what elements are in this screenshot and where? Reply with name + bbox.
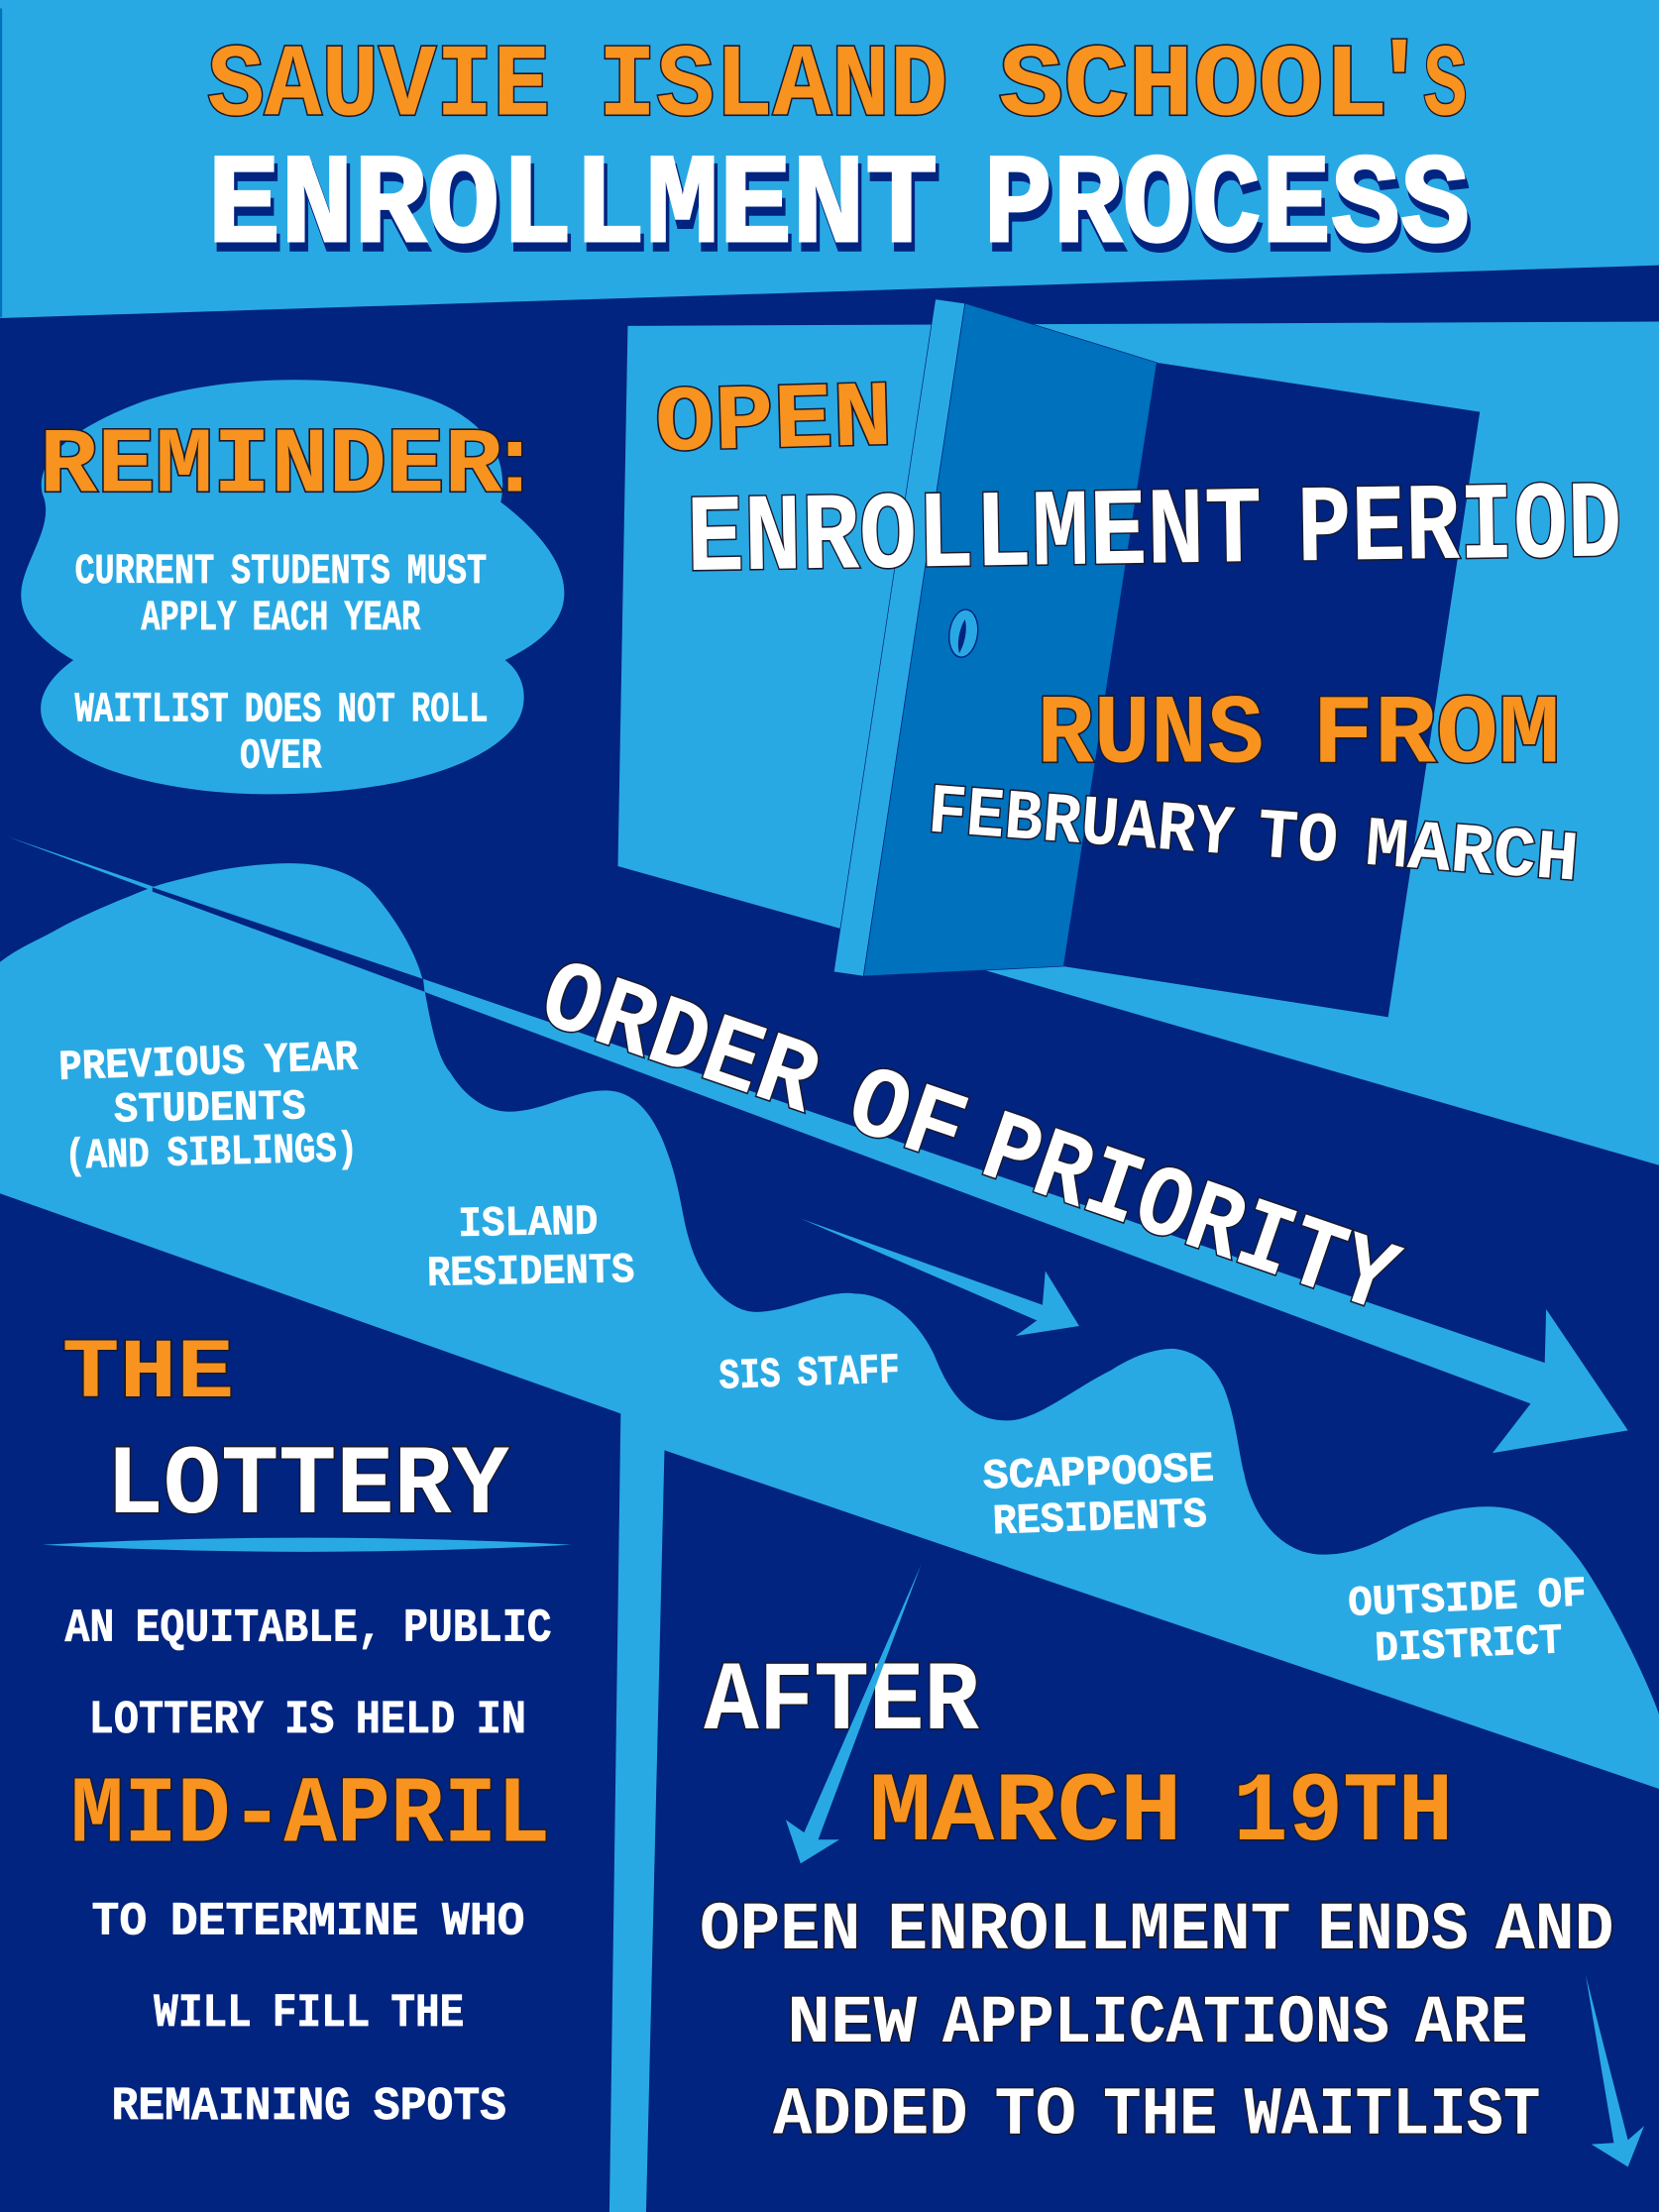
after text: WAITLIST [1244, 2076, 1540, 2154]
order of priority heading: OF [832, 1046, 980, 1192]
date range: MARCH [1363, 807, 1581, 902]
lottery text: MID-APRIL [70, 1763, 550, 1870]
reminder heading: REMINDER [40, 414, 502, 519]
priority wave band [0, 863, 1659, 2212]
reminder text: APPLY EACH YEAR [141, 594, 420, 642]
door knob [946, 608, 981, 659]
priority 5 label: DISTRICT [1374, 1616, 1564, 1673]
priority 5 label [1347, 1569, 1588, 1673]
after text: ADDED [773, 2076, 967, 2154]
date range [926, 774, 1581, 902]
priority 5 label: OUTSIDE OF [1347, 1569, 1588, 1628]
reminder text: WAITLIST DOES NOT ROLL [74, 685, 489, 733]
lottery text: LOTTERY IS HELD IN [89, 1695, 526, 1747]
enrollment period heading [686, 465, 1622, 604]
the heading: THE [62, 1326, 234, 1422]
panel: reminder blob [21, 380, 564, 794]
priority 2 label: RESIDENTS [427, 1246, 635, 1298]
after text: TO [995, 2076, 1076, 2154]
lottery heading: LOTTERY [106, 1430, 509, 1542]
lottery text [64, 1603, 552, 2134]
priority 1 label [58, 1033, 359, 1181]
title line: Enrollment Process: ENROLLMENT [210, 143, 940, 288]
after text: THE [1103, 2076, 1217, 2154]
arrow: down-right [1586, 1975, 1644, 2166]
title line: Enrollment Process: PROCESS [983, 134, 1470, 279]
runs from heading: RUNS [1037, 680, 1264, 792]
lottery text: REMAINING SPOTS [111, 2081, 506, 2134]
order of priority heading [526, 940, 1411, 1341]
arrow: down-left [786, 1565, 922, 1863]
order of priority heading: PRIORITY [967, 1092, 1411, 1341]
title line: Sauvie Island School's: SAUVIE [207, 29, 550, 146]
after text: ENDS [1318, 1892, 1469, 1969]
after text: ENROLLMENT [887, 1892, 1290, 1969]
runs from heading: FROM [1312, 680, 1560, 792]
date range: TO [1255, 799, 1341, 883]
panel: open door [617, 299, 1659, 1165]
title line: Enrollment Process: PROCESS [986, 143, 1473, 288]
title line: Enrollment Process [207, 134, 1473, 288]
small arrow [802, 1219, 1079, 1336]
title banner [0, 0, 1659, 318]
order of priority heading: ORDER [526, 940, 832, 1142]
after text [700, 1892, 1613, 2154]
after text: APPLICATIONS [942, 1985, 1389, 2062]
after text: NEW [787, 1985, 917, 2062]
march 19th heading: 19TH [1233, 1757, 1453, 1869]
lottery divider [43, 1538, 572, 1552]
priority 1 label: (AND SIBLINGS) [64, 1125, 359, 1181]
enrollment period heading: ENROLLMENT [686, 471, 1263, 604]
march 19th heading [869, 1757, 1453, 1869]
title line: Sauvie Island School's [207, 29, 1467, 146]
priority 4 label: SCAPPOOSE [982, 1445, 1215, 1501]
priority 3 label: SIS STAFF [719, 1346, 901, 1401]
panel: the lottery [43, 1326, 572, 2134]
title line: Sauvie Island School's: S [1423, 29, 1467, 146]
after heading: AFTER [704, 1646, 979, 1758]
lottery text: AN EQUITABLE, PUBLIC [64, 1603, 552, 1655]
reminder text [74, 547, 489, 780]
march 19th heading: MARCH [869, 1757, 1182, 1869]
arrow: order of priority [7, 836, 1628, 1453]
panel: after march 19th [700, 1565, 1644, 2166]
priority 4 label [982, 1445, 1215, 1546]
lottery text: WILL FILL THE [154, 1988, 464, 2041]
runs from heading [1037, 680, 1560, 792]
priority labels [58, 1033, 1588, 1673]
title line: Sauvie Island School's: ISLAND [599, 29, 948, 146]
priority 4 label: RESIDENTS [992, 1491, 1208, 1546]
title line: Enrollment Process: ENROLLMENT [207, 134, 939, 279]
after text: OPEN [700, 1892, 860, 1969]
title line: Sauvie Island School's: ' [1369, 29, 1430, 146]
open heading: OPEN [654, 368, 894, 479]
after text: ARE [1415, 1985, 1528, 2062]
priority 2 label: ISLAND [458, 1198, 599, 1249]
date range: FEBRUARY [926, 774, 1237, 876]
lottery text: TO DETERMINE WHO [92, 1897, 525, 1949]
reminder heading: : [487, 414, 542, 519]
priority 1 label: PREVIOUS YEAR [58, 1033, 359, 1092]
priority 2 label [427, 1198, 635, 1298]
reminder text: CURRENT STUDENTS MUST [74, 547, 487, 596]
after text: AND [1495, 1892, 1613, 1969]
reminder text: OVER [240, 731, 322, 780]
title line: Sauvie Island School's: SCHOOL [999, 29, 1388, 146]
priority 1 label: STUDENTS [114, 1082, 306, 1135]
